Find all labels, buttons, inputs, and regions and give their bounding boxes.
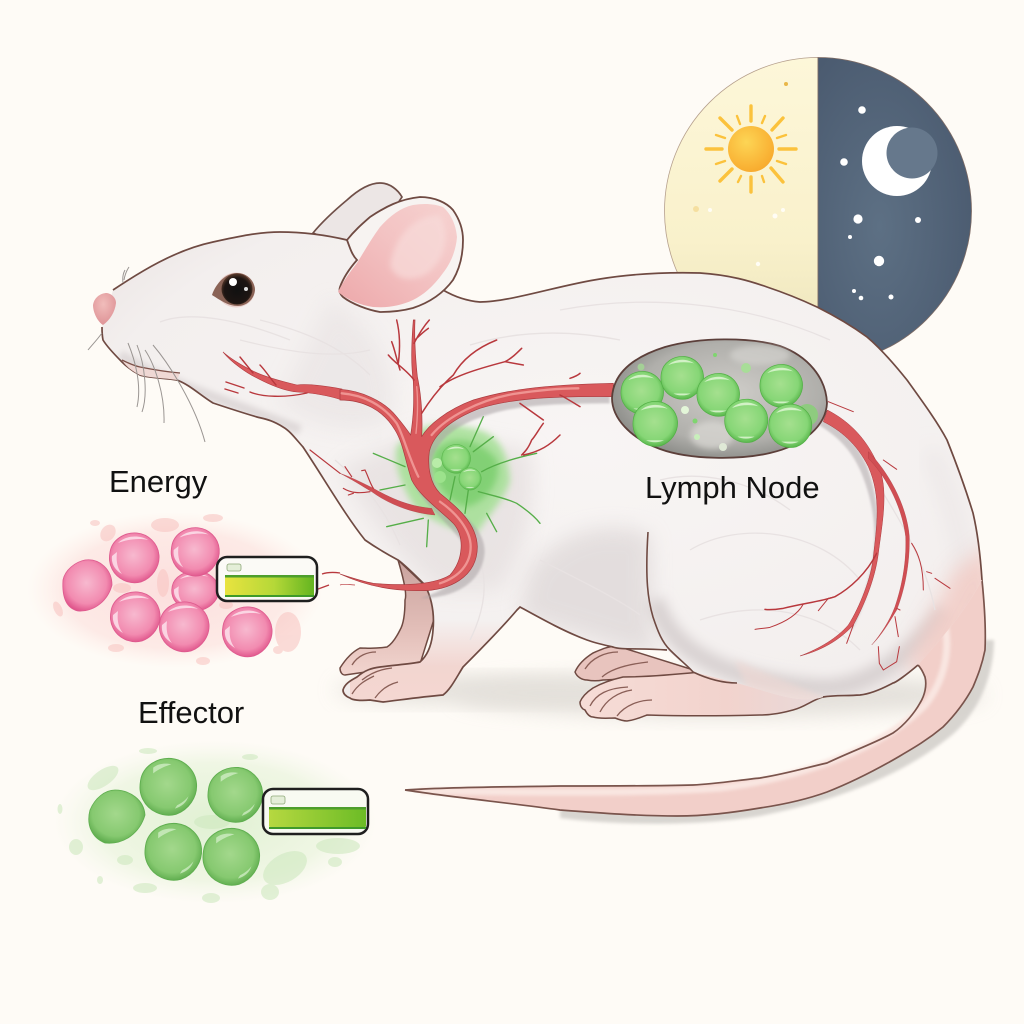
distal vessel xyxy=(310,572,340,592)
green cell xyxy=(89,790,145,843)
pink halo xyxy=(27,512,323,668)
front ear xyxy=(338,197,463,312)
green cell xyxy=(140,758,197,815)
day and night circle xyxy=(664,58,971,364)
effector gauge xyxy=(263,789,368,834)
icon: moon xyxy=(862,126,938,196)
head artery xyxy=(223,352,342,400)
upper and side branches xyxy=(388,320,580,455)
green branches xyxy=(373,417,540,547)
green node glow xyxy=(373,417,540,547)
pink flecks xyxy=(51,514,301,665)
inner ear xyxy=(338,204,457,307)
outer branch xyxy=(868,452,909,645)
mouse xyxy=(88,183,995,824)
thigh branch stub xyxy=(340,583,355,586)
far front leg xyxy=(340,560,440,675)
right vessels xyxy=(755,402,950,670)
far hind foot xyxy=(575,646,700,681)
vessel network xyxy=(223,320,950,670)
whiskers xyxy=(88,267,205,442)
panel: energy cells xyxy=(27,512,323,668)
paw toe lines xyxy=(352,652,652,716)
green cell xyxy=(208,767,263,822)
label: Effector: Effector xyxy=(138,695,244,730)
head branches xyxy=(225,357,307,396)
pink cell xyxy=(63,560,112,611)
twigs xyxy=(755,402,950,670)
haunch contour xyxy=(647,532,737,683)
body shading xyxy=(120,300,995,720)
pink cell xyxy=(110,592,160,642)
eye xyxy=(212,272,255,308)
green cell xyxy=(145,823,202,880)
node blotches xyxy=(638,345,790,451)
day specks xyxy=(693,82,788,266)
green cells at branch node xyxy=(432,444,481,490)
fur lines xyxy=(160,302,935,650)
green cell xyxy=(203,828,260,885)
vessel shadow xyxy=(398,390,610,598)
pink cell xyxy=(222,607,272,657)
lymph node xyxy=(612,339,827,458)
night half xyxy=(818,58,971,364)
label: Energy: Energy xyxy=(109,464,208,499)
green flecks xyxy=(58,748,360,903)
mouth xyxy=(122,360,180,380)
icon: sun xyxy=(706,106,796,192)
lymph node capsule xyxy=(612,339,827,458)
near hind foot xyxy=(580,672,823,721)
stars xyxy=(840,106,921,300)
lower left branch xyxy=(340,473,435,515)
vessel highlights xyxy=(342,387,578,583)
body outline xyxy=(102,232,982,702)
body and head xyxy=(102,232,982,702)
tail shadow xyxy=(560,640,994,824)
label: Lymph Node: Lymph Node xyxy=(645,470,820,505)
pink cell xyxy=(172,571,219,611)
pink cell xyxy=(109,533,159,583)
tail xyxy=(405,580,985,816)
green halo xyxy=(53,740,377,904)
pink cell xyxy=(171,528,219,576)
day half xyxy=(664,58,818,364)
energy gauge xyxy=(217,557,317,601)
inner branch xyxy=(800,410,884,656)
panel: effector cells xyxy=(53,740,377,904)
main artery xyxy=(340,320,613,591)
ground shadow xyxy=(335,673,985,717)
pink cell xyxy=(159,602,209,652)
ear highlight xyxy=(390,215,446,279)
lymphocytes xyxy=(621,356,818,448)
nose xyxy=(93,293,116,325)
back ear xyxy=(313,183,402,245)
